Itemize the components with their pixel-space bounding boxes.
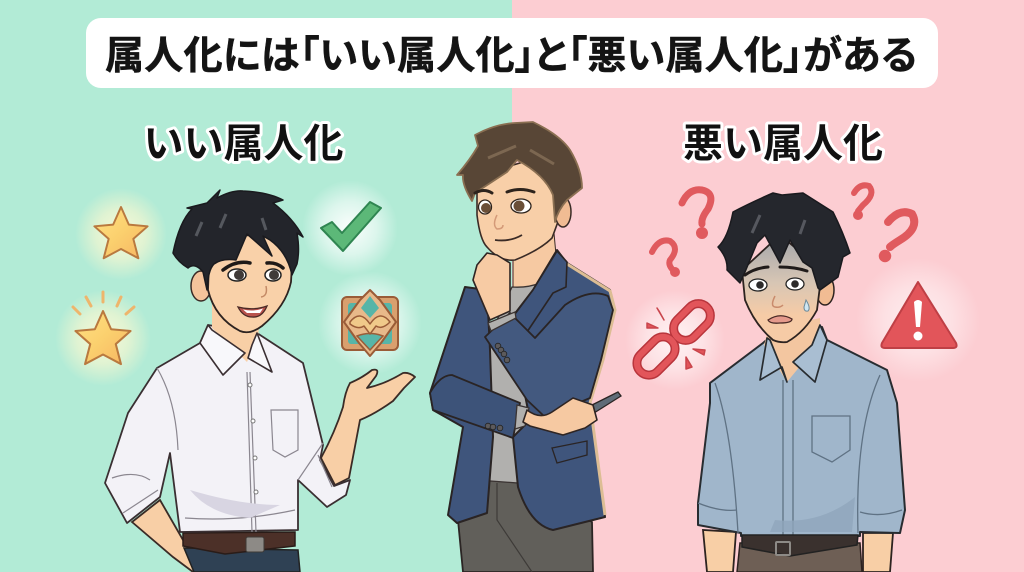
blue shirt: [698, 327, 905, 536]
icon: sparkling star: [55, 290, 151, 386]
eyes and brows: [745, 267, 807, 275]
background: green left side: [0, 0, 512, 572]
icon: check mark: [302, 180, 398, 276]
ear: [191, 271, 211, 301]
trousers: [737, 543, 862, 572]
hair: [173, 190, 303, 290]
icon: ornate emblem: [318, 271, 422, 375]
belt: [742, 535, 858, 556]
heading: good: いい属人化: [144, 122, 344, 166]
icon: warning triangle: [856, 258, 980, 382]
character: troubled employee: [698, 193, 905, 572]
mouth and nose: [495, 235, 522, 240]
eyes and brows: [475, 190, 534, 193]
jacket left panel: [430, 287, 493, 523]
title banner: [86, 18, 938, 88]
collar: [200, 325, 272, 375]
neck: [513, 222, 556, 290]
raised forearm and hand: [321, 370, 415, 485]
cuffs: [488, 312, 529, 429]
hair: [457, 122, 582, 222]
face: [477, 160, 566, 260]
lapel: [512, 251, 567, 332]
face: [208, 235, 293, 332]
background: pink right side: [512, 0, 1024, 572]
folded forearm sleeve: [430, 375, 520, 438]
title text: 属人化には「いい属人化」と「悪い属人化」がある: [105, 35, 917, 78]
ear: [555, 197, 571, 227]
neck: [212, 300, 260, 362]
character: thoughtful man: [430, 122, 621, 572]
T-shirt: [477, 283, 540, 483]
nose and mouth: [772, 296, 783, 307]
pen: [590, 392, 621, 413]
neck: [764, 318, 820, 382]
hair: [718, 193, 850, 290]
trousers: [458, 478, 593, 572]
face: [742, 235, 822, 342]
pocket: [552, 441, 587, 463]
jacket right panel: [510, 250, 615, 530]
icon: broken chain: [625, 290, 725, 390]
white shirt: [105, 325, 350, 532]
icon: star top: [75, 188, 167, 280]
belt: [183, 532, 295, 554]
mouth and nose: [238, 306, 267, 317]
eyes and brows: [223, 262, 283, 270]
sweat drop: [804, 300, 809, 311]
hand on chin: [473, 253, 510, 320]
collar: [760, 325, 827, 382]
heading: bad: 悪い属人化: [683, 122, 883, 166]
raised sleeve: [485, 293, 613, 417]
character: good employee: [105, 190, 415, 572]
arms: [703, 530, 893, 572]
icon: question marks: [652, 185, 914, 274]
trousers: [184, 548, 300, 572]
hand holding pen: [523, 398, 597, 435]
jacket tan rim: [567, 264, 615, 515]
ear: [816, 275, 834, 305]
left arm: [132, 500, 228, 572]
sleeve buttons: [485, 343, 510, 431]
